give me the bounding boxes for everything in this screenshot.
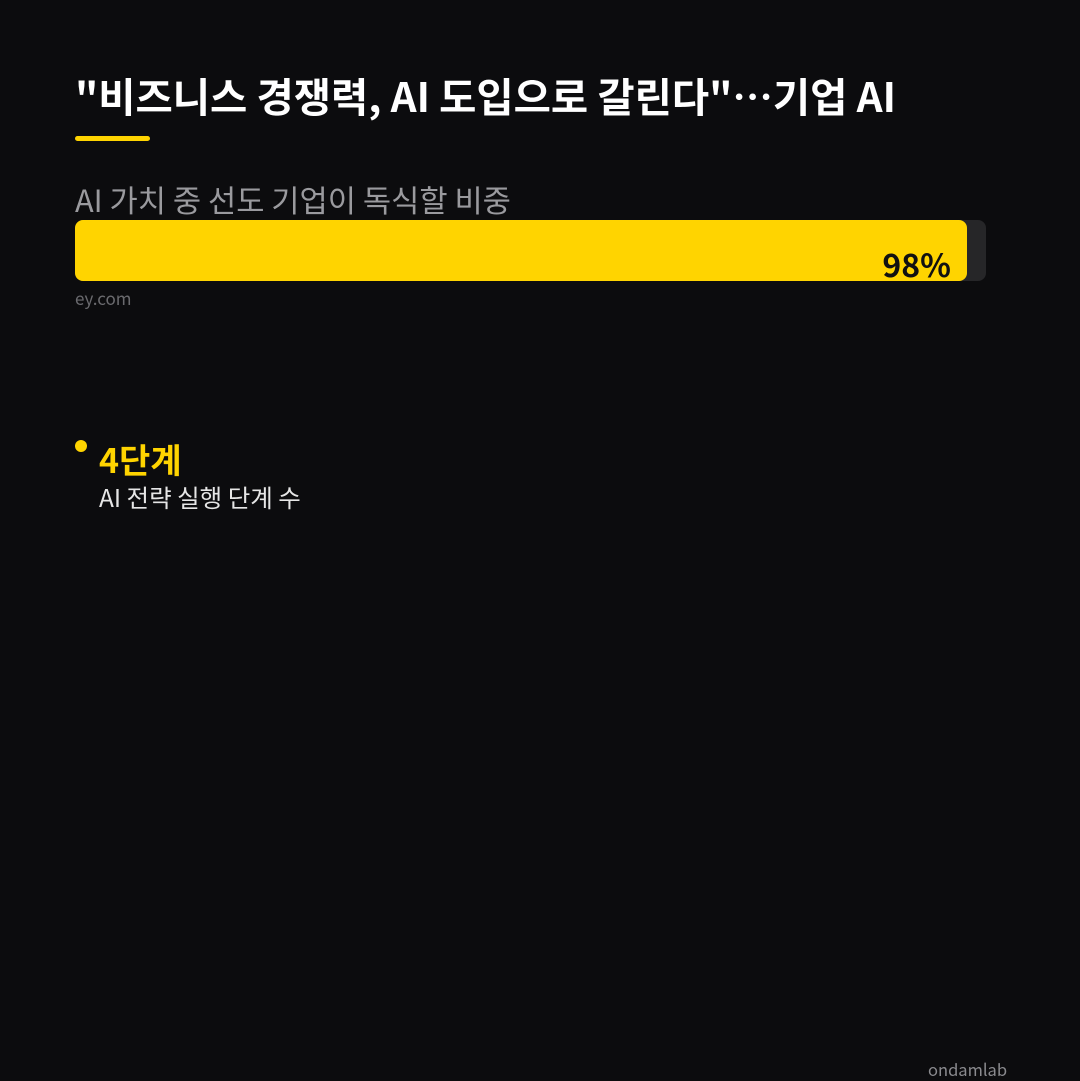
- title: "비즈니스 경쟁력, AI 도입으로 갈린다"…기업 AI: [75, 65, 896, 124]
- bar fill: [75, 220, 967, 281]
- bullet dot: [75, 440, 87, 452]
- bar chart: [75, 220, 986, 281]
- bar label: AI 가치 중 선도 기업이 독식할 비중: [75, 176, 511, 221]
- stat description: AI 전략 실행 단계 수: [99, 480, 301, 515]
- footer brand: ondamlab: [928, 1057, 1007, 1081]
- title underline: [75, 136, 150, 141]
- bar value: 98%: [882, 241, 951, 287]
- stat item: [75, 434, 301, 515]
- stat value: 4단계: [99, 434, 182, 483]
- source: ey.com: [75, 285, 132, 310]
